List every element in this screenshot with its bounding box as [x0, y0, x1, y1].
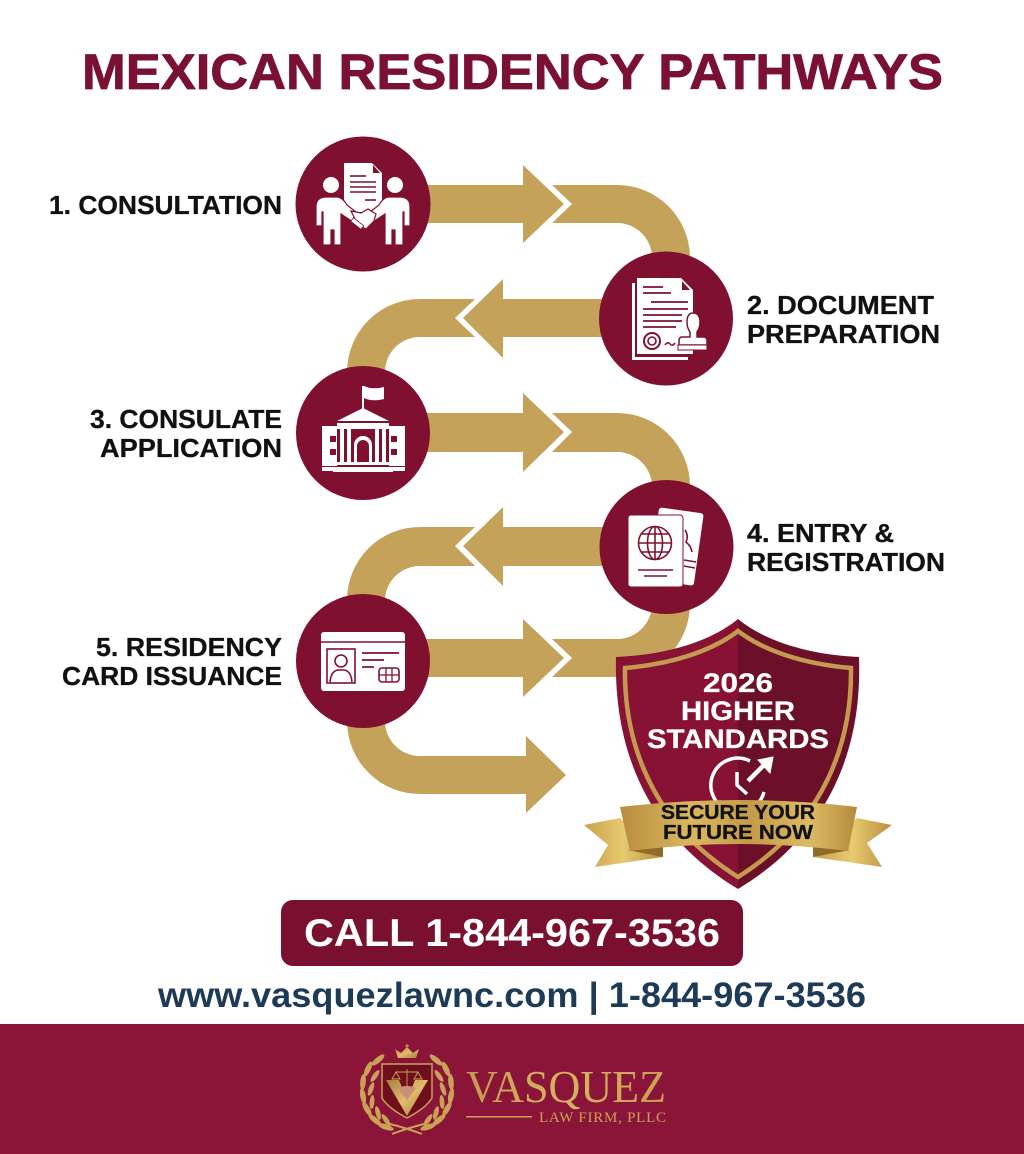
- circle: document preparation: [599, 252, 733, 386]
- arrow: step 3 to step 4: [420, 393, 690, 498]
- label: consulate application: 3. CONSULATE: [90, 404, 282, 434]
- logo subtitle: LAW FIRM, PLLC: [539, 1110, 666, 1126]
- title: MEXICAN RESIDENCY PATHWAYS: [82, 44, 943, 100]
- arrow: step 4 to step 5: [347, 507, 610, 612]
- label: residency card issuance: CARD ISSUANCE: [62, 661, 282, 691]
- arrow: step 1 to step 2: [420, 165, 690, 270]
- label: document preparation: PREPARATION: [747, 319, 940, 349]
- badge: 2026 higher standards shield: [584, 619, 892, 889]
- website and phone line: www.vasquezlawnc.com | 1-844-967-3536: [157, 976, 866, 1015]
- call button: CALL 1-844-967-3536: [304, 912, 720, 955]
- circle: consultation: [296, 136, 430, 272]
- logo crest: [359, 1044, 455, 1134]
- label: residency card issuance: 5. RESIDENCY: [96, 632, 282, 662]
- shield heading: HIGHER: [681, 696, 795, 726]
- icon: passport: [628, 507, 704, 587]
- ribbon text: FUTURE NOW: [663, 822, 813, 844]
- logo wordmark: VASQUEZ: [466, 1062, 666, 1112]
- label: consultation: 1. CONSULTATION: [49, 190, 282, 220]
- circle: residency card issuance: [296, 594, 430, 728]
- step 5: residency card issuance: [62, 594, 430, 728]
- step 3: consulate application: [90, 366, 430, 500]
- icon: clock with rising arrow: [711, 757, 773, 812]
- label: consulate application: APPLICATION: [100, 433, 282, 463]
- ribbon: [584, 800, 892, 867]
- icon: handshake with document: [316, 163, 410, 245]
- label: document preparation: 2. DOCUMENT: [747, 290, 934, 320]
- shield body: [616, 619, 859, 889]
- footer band: [0, 1024, 1024, 1154]
- shield heading: 2026: [703, 668, 773, 698]
- call button: [281, 900, 743, 966]
- icon: consulate building: [322, 386, 405, 472]
- arrow: step 2 to step 3: [347, 279, 610, 385]
- logo rule: [466, 1116, 532, 1118]
- ribbon text: [661, 802, 816, 844]
- shield heading: [647, 668, 829, 754]
- icon: ID card: [321, 632, 405, 691]
- arrow: step 5 toward shield: [420, 595, 690, 697]
- label: entry and registration: 4. ENTRY &: [747, 518, 894, 548]
- step 1: consultation: [49, 136, 430, 272]
- logo: Vasquez Law Firm: [359, 1044, 666, 1134]
- circle: consulate application: [296, 366, 430, 500]
- ribbon text: SECURE YOUR: [661, 802, 816, 824]
- shield heading: STANDARDS: [647, 724, 829, 754]
- icon: stamped document: [632, 278, 707, 360]
- circle: entry and registration: [600, 480, 734, 614]
- step 2: document preparation: [599, 252, 940, 386]
- arrow: step 5 final: [347, 710, 566, 813]
- label: entry and registration: REGISTRATION: [747, 547, 945, 577]
- step 4: entry and registration: [600, 480, 945, 614]
